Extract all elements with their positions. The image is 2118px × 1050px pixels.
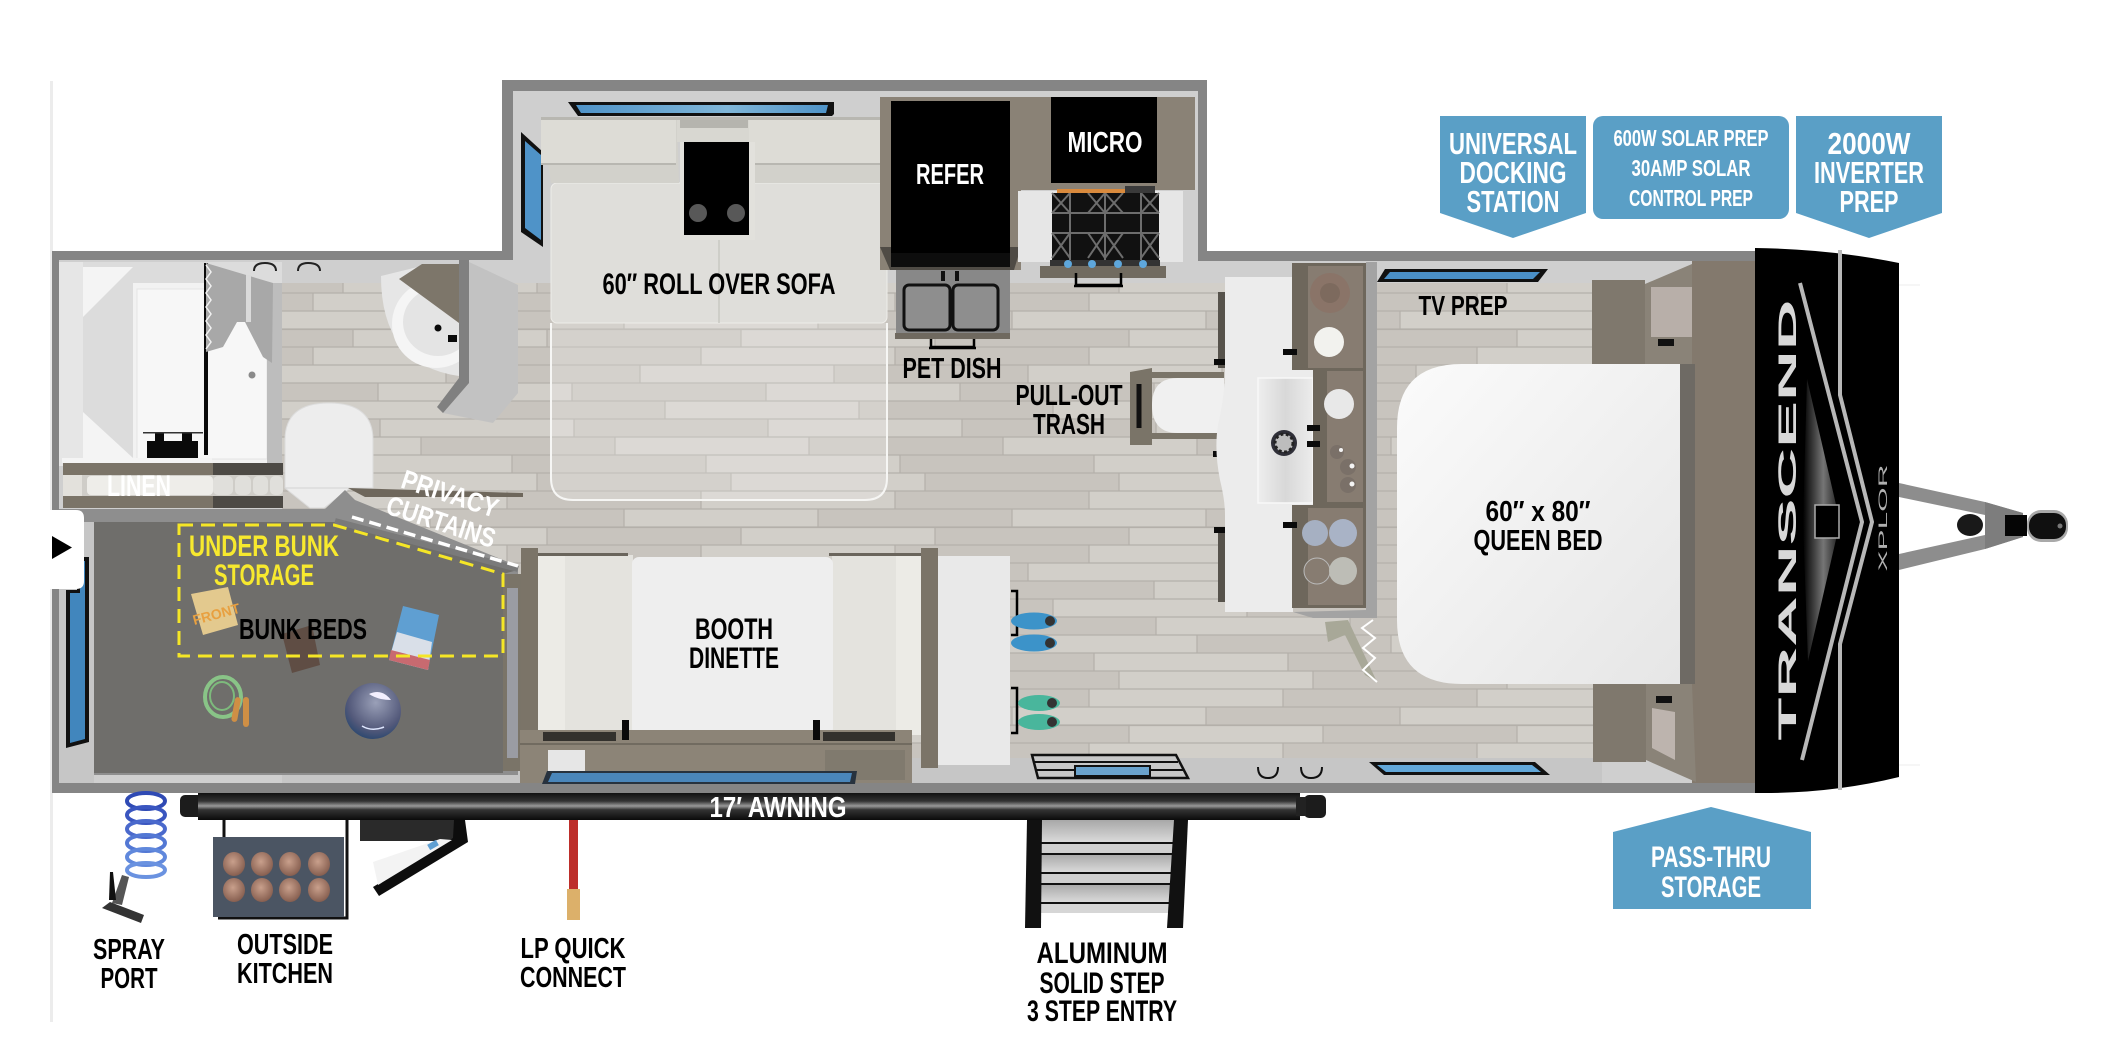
TV prep label: TV PREP xyxy=(1418,290,1508,321)
bunk window xyxy=(66,557,89,748)
spray port hose and nozzle xyxy=(102,793,165,923)
bath partition wall xyxy=(437,260,518,423)
badge: universal docking station: DOCKING xyxy=(1460,155,1566,190)
badge: inverter prep xyxy=(1796,116,1942,238)
stove xyxy=(1018,186,1183,286)
pet dish label: PET DISH xyxy=(902,353,1002,385)
pet dish xyxy=(895,270,1010,348)
sink drain xyxy=(1271,430,1297,456)
outside kitchen label xyxy=(237,929,333,990)
linen label: LINEN xyxy=(107,470,171,503)
teal shoes xyxy=(1018,695,1060,730)
wardrobe top xyxy=(1592,264,1692,364)
kitchen partition wall xyxy=(1293,262,1377,618)
table xyxy=(632,557,833,735)
under bunk storage outline xyxy=(179,525,503,656)
privacy curtains label: CURTAINS xyxy=(383,490,499,554)
book: front desk xyxy=(191,587,242,635)
booth dinette label xyxy=(689,613,779,675)
rolled towels xyxy=(213,476,283,495)
wardrobe bottom xyxy=(1593,684,1696,782)
aluminum step label: SOLID STEP xyxy=(1040,967,1164,1000)
white play button tab xyxy=(48,510,84,589)
LP quick connect label xyxy=(520,933,626,994)
floor mat with vent xyxy=(1032,755,1188,778)
entry steps xyxy=(1025,820,1188,928)
linen shelf xyxy=(62,458,283,508)
queen bed label: 60″ x 80″ xyxy=(1486,496,1591,528)
dish cabinet middle xyxy=(1307,368,1366,505)
micro label: MICRO xyxy=(1068,127,1142,159)
outside kitchen label: OUTSIDE xyxy=(237,929,333,961)
right back cushion xyxy=(749,120,880,183)
U hooks xyxy=(1258,767,1322,778)
bunk beds label: BUNK BEDS xyxy=(239,614,367,646)
privacy curtain rail xyxy=(348,488,523,497)
center console xyxy=(677,120,755,240)
awning label: 17′ AWNING xyxy=(710,792,846,824)
book: brown xyxy=(282,625,320,673)
pull-out trash label: PULL-OUT xyxy=(1016,380,1123,412)
hitch tongue xyxy=(1899,483,2068,570)
queen bed label xyxy=(1474,496,1602,557)
bathroom xyxy=(59,262,282,467)
badge: pass-thru storage: PASS-THRU xyxy=(1651,841,1771,874)
ball xyxy=(345,683,401,739)
badge: solar prep: CONTROL PREP xyxy=(1629,185,1753,211)
dinette window xyxy=(542,771,857,784)
badge: solar prep xyxy=(1593,116,1789,219)
dish cabinet upper xyxy=(1283,263,1366,370)
queen bed xyxy=(1397,364,1695,684)
badge: inverter prep: INVERTER xyxy=(1814,155,1924,190)
marble counter xyxy=(938,556,1010,765)
under bunk storage label: STORAGE xyxy=(214,559,314,592)
blue shoes xyxy=(1011,612,1057,652)
refer label: REFER xyxy=(916,159,984,191)
kitchen island xyxy=(1216,277,1313,612)
LP hose xyxy=(567,820,580,920)
book: zombie xyxy=(389,606,439,670)
outside kitchen xyxy=(213,820,347,918)
sink countertop xyxy=(399,264,459,323)
bedroom window bottom xyxy=(1369,762,1550,775)
booth dinette label: DINETTE xyxy=(689,642,779,675)
left back cushion xyxy=(541,120,679,183)
sofa label: 60″ ROLL OVER SOFA xyxy=(602,268,836,301)
toilet xyxy=(285,403,373,508)
folding door xyxy=(1325,620,1377,682)
sofa window top xyxy=(568,102,834,116)
badge: solar prep: 30AMP SOLAR xyxy=(1632,155,1751,181)
aluminum step label: ALUMINUM xyxy=(1036,937,1168,970)
extended sofa outline xyxy=(551,323,887,500)
shoe racks xyxy=(1011,591,1017,733)
left margin strip xyxy=(50,81,53,1022)
booth dinette xyxy=(521,548,938,768)
chevron graphic xyxy=(1800,250,1872,790)
badge: universal docking station: UNIVERSAL xyxy=(1449,126,1577,161)
roll over sofa xyxy=(541,117,887,323)
pull-out trash xyxy=(1130,368,1224,445)
aluminum step label: 3 STEP ENTRY xyxy=(1027,995,1177,1028)
book: front desk: FRONT xyxy=(191,600,242,628)
privacy curtains label: PRIVACY xyxy=(398,464,502,524)
badge: solar prep: 600W SOLAR PREP xyxy=(1614,125,1768,151)
outside kitchen label: KITCHEN xyxy=(237,958,333,990)
LP quick connect label: CONNECT xyxy=(520,962,626,994)
outside kitchen door xyxy=(360,820,468,896)
trailer shell xyxy=(52,80,1760,793)
shower curtain xyxy=(206,263,273,363)
under bunk storage label xyxy=(189,530,339,592)
bathroom hooks xyxy=(254,263,320,271)
privacy curtains label xyxy=(383,464,502,554)
badge: universal docking station xyxy=(1440,116,1586,238)
dinette base cabinet xyxy=(520,720,912,783)
jump rope xyxy=(205,677,249,727)
LP quick connect label: LP QUICK xyxy=(520,933,626,965)
queen bed label: QUEEN BED xyxy=(1474,525,1602,557)
Xplor logo: XPLOR xyxy=(1876,464,1890,572)
badge: pass-thru storage xyxy=(1613,807,1811,909)
corner sink xyxy=(381,264,459,376)
spray port label xyxy=(93,934,165,995)
badge: pass-thru storage: STORAGE xyxy=(1661,871,1761,904)
front cap xyxy=(1755,248,1899,793)
Transcend logo: TRANSCEND xyxy=(1774,300,1802,740)
faint guide ticks beside cap xyxy=(1899,285,1920,765)
badge: inverter prep: 2000W xyxy=(1828,126,1911,161)
shower faucet xyxy=(143,432,203,458)
pull-out trash label: TRASH xyxy=(1033,409,1105,441)
booth dinette label: BOOTH xyxy=(695,613,773,646)
privacy curtain dashes xyxy=(352,517,518,566)
bunk room xyxy=(59,490,521,783)
plank floor xyxy=(282,283,1602,783)
spray port label: PORT xyxy=(100,963,158,995)
under bunk storage label: UNDER BUNK xyxy=(189,530,339,563)
pull-out trash label xyxy=(1016,380,1123,441)
badge: inverter prep: PREP xyxy=(1840,184,1898,219)
badge: universal docking station: STATION xyxy=(1466,184,1560,219)
awning xyxy=(180,792,1326,824)
island side cabinet fronts xyxy=(1213,292,1225,602)
spray port label: SPRAY xyxy=(93,934,165,966)
refrigerator xyxy=(880,97,1021,270)
aluminum step label xyxy=(1027,937,1177,1028)
bedroom cabinet strip xyxy=(1692,261,1756,783)
microwave xyxy=(1021,97,1195,190)
TV window xyxy=(1377,269,1548,282)
dish cabinet lower xyxy=(1283,505,1366,608)
sofa window side xyxy=(521,132,543,247)
